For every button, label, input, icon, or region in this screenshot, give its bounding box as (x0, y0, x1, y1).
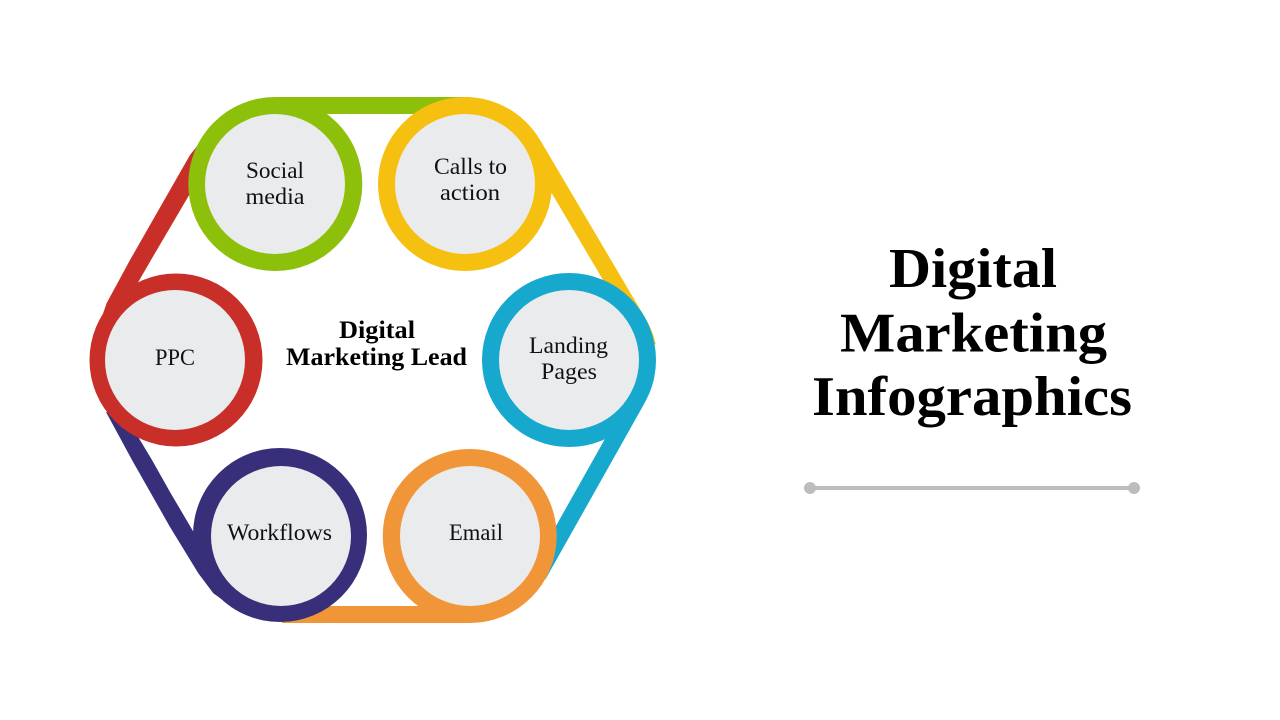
center label: Digital Marketing Lead (286, 317, 467, 371)
node: Workflows (193, 448, 367, 622)
node: Email: Email (449, 520, 503, 546)
title: Digital Marketing Infographics: Infographics (812, 366, 1132, 428)
title: Digital Marketing Infographics: Marketing (840, 302, 1107, 364)
node: Email (383, 449, 557, 623)
node: Social media: media (246, 184, 305, 210)
band: yellow upper right (533, 145, 648, 346)
node: Landing Pages: Landing (529, 333, 608, 359)
node: Workflows: Workflows (227, 520, 332, 546)
node: Landing Pages (482, 273, 656, 447)
band: blue lower right (538, 399, 637, 575)
node: Social media (188, 97, 362, 271)
node: PPC (90, 274, 262, 446)
node: Landing Pages: Pages (541, 359, 597, 385)
node: Social media: Social (246, 158, 304, 184)
node: PPC: PPC (155, 345, 195, 371)
band: purple lower left (106, 412, 250, 610)
center label: Digital Marketing Lead: Digital (339, 317, 415, 344)
band: green top (275, 97, 470, 114)
title: Digital Marketing Infographics: Digital (889, 238, 1057, 300)
title: Digital Marketing Infographics (812, 238, 1132, 428)
node: Calls to action: action (440, 180, 500, 206)
node: Calls to action: Calls to (434, 154, 507, 180)
node: Calls to action (378, 97, 552, 271)
title underline with end dots (804, 482, 1140, 494)
band: orange bottom (282, 606, 470, 623)
hexagon connector bands (102, 106, 648, 614)
band: red upper left (102, 143, 215, 315)
center label: Digital Marketing Lead: Marketing Lead (286, 344, 467, 371)
